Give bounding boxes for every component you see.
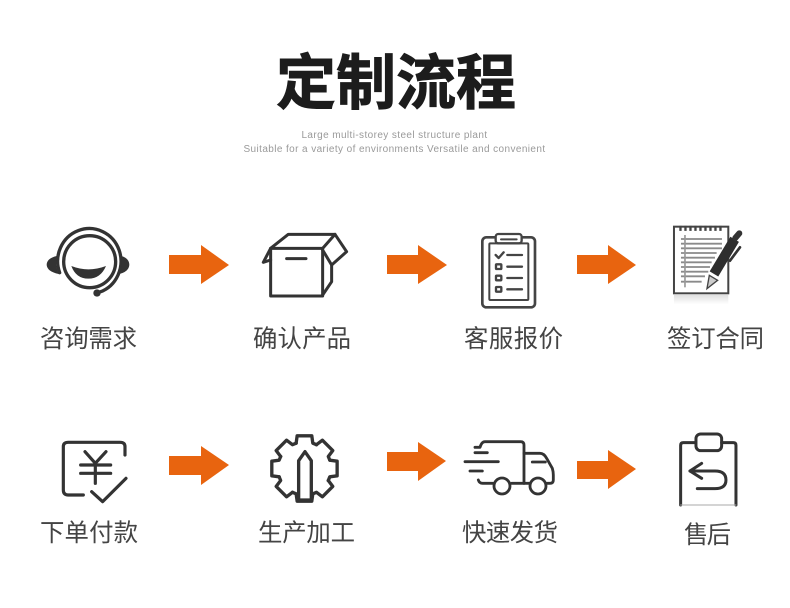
arrow 5 [387, 442, 446, 481]
icon: payment yen [63, 442, 126, 502]
label: quotation: 客服报价 [464, 326, 563, 353]
icon: customer service headset [47, 229, 129, 297]
label: confirm product: 确认产品 [253, 326, 351, 353]
icon: delivery truck [465, 442, 553, 494]
subtitle: Large multi-storey steel structure plant [301, 130, 488, 141]
subtitle: Suitable for a variety of environments Versatile and convenient [243, 144, 546, 155]
icon: production gear [272, 436, 337, 501]
label: sign contract: 签订合同 [667, 326, 764, 353]
arrow 4 [169, 446, 229, 485]
icon: box [263, 234, 347, 296]
label: after sales: 售后 [684, 522, 731, 549]
label: fast delivery: 快速发货 [462, 520, 558, 547]
label: consult needs: 咨询需求 [40, 326, 137, 353]
icon: notebook and pen [674, 227, 740, 304]
label: production: 生产加工 [258, 520, 355, 547]
label: place order: 下单付款 [40, 520, 138, 547]
subtitle [243, 130, 546, 155]
arrow 6 [577, 450, 636, 489]
icon: after-sales return clipboard [681, 434, 736, 505]
arrow 1 [169, 245, 229, 284]
title: 定制流程 [276, 35, 516, 122]
icon: quote clipboard [482, 234, 535, 307]
arrow 3 [577, 245, 636, 284]
arrow 2 [387, 245, 447, 284]
